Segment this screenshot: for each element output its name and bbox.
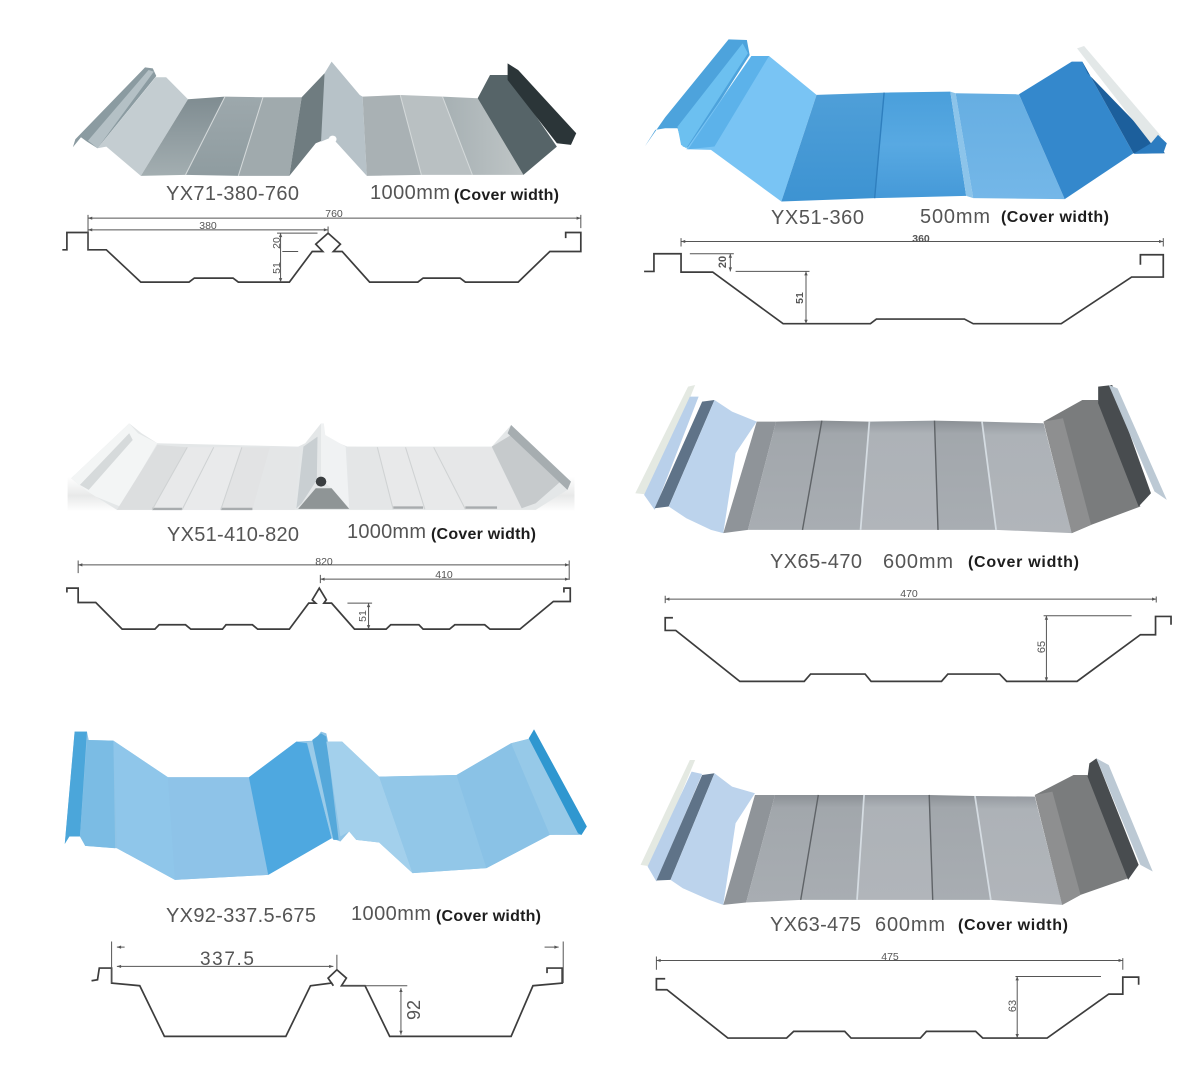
dimension 820: 820 xyxy=(315,556,333,568)
cover width label: (Cover width) xyxy=(958,917,1068,934)
dimension 410: 410 xyxy=(435,569,453,581)
panel: YX63-475 xyxy=(641,758,1153,1038)
cover width label: (Cover width) xyxy=(436,908,541,925)
dimension 51: 51 xyxy=(357,610,369,622)
cover width label: (Cover width) xyxy=(1001,209,1109,226)
cover width label: (Cover width) xyxy=(431,526,536,543)
cross-section profile xyxy=(644,238,1163,324)
model name: YX92-337.5-675 xyxy=(166,905,316,927)
cover width value: 1000mm xyxy=(351,903,431,925)
cross-section profile xyxy=(656,956,1139,1038)
dimension 475: 475 xyxy=(881,951,899,963)
dimension 337.5: 337.5 xyxy=(200,949,254,970)
dimension 20: 20 xyxy=(717,256,729,268)
model name: YX51-410-820 xyxy=(167,524,299,546)
dimension 20: 20 xyxy=(271,237,283,249)
roof sheet: grey YX71 xyxy=(73,62,576,176)
dimension 380: 380 xyxy=(199,220,217,232)
dimension 92: 92 xyxy=(404,1000,424,1020)
cross-section profile xyxy=(665,596,1171,681)
dimension 51: 51 xyxy=(794,292,806,304)
dimension 360: 360 xyxy=(912,233,930,245)
roof sheet: white YX51 xyxy=(68,423,574,512)
cross-section profile xyxy=(62,215,581,282)
model name: YX65-470 xyxy=(770,551,862,573)
panel: YX65-470 xyxy=(635,385,1171,681)
roof sheet: blue YX51 xyxy=(645,39,1167,201)
cover width value: 500mm xyxy=(920,206,990,228)
model name: YX51-360 xyxy=(771,207,864,229)
cover width label: (Cover width) xyxy=(454,187,559,204)
cover width value: 600mm xyxy=(875,914,945,936)
roof sheet: blue YX92 xyxy=(65,729,587,880)
dimension 63: 63 xyxy=(1007,1000,1019,1012)
cover width value: 1000mm xyxy=(370,182,450,204)
dimension 760: 760 xyxy=(325,208,343,220)
cross-section profile xyxy=(67,561,570,629)
panel: YX51-410-820 xyxy=(67,423,574,629)
model name: YX63-475 xyxy=(770,914,861,936)
dimension 51: 51 xyxy=(271,262,283,274)
panel: YX71-380-760 xyxy=(62,62,581,282)
cover width label: (Cover width) xyxy=(968,554,1079,571)
cover width value: 1000mm xyxy=(347,521,426,543)
cross-section profile xyxy=(92,941,563,1036)
roof sheet: grey YX63 xyxy=(641,758,1153,905)
model name: YX71-380-760 xyxy=(166,183,299,205)
roof sheet: grey YX65 xyxy=(635,385,1167,533)
panel: YX51-360 xyxy=(644,39,1167,324)
panel: YX92-337.5-675 xyxy=(65,729,587,1036)
dimension 65: 65 xyxy=(1036,641,1048,653)
dimension 470: 470 xyxy=(900,588,918,600)
cover width value: 600mm xyxy=(883,551,953,573)
